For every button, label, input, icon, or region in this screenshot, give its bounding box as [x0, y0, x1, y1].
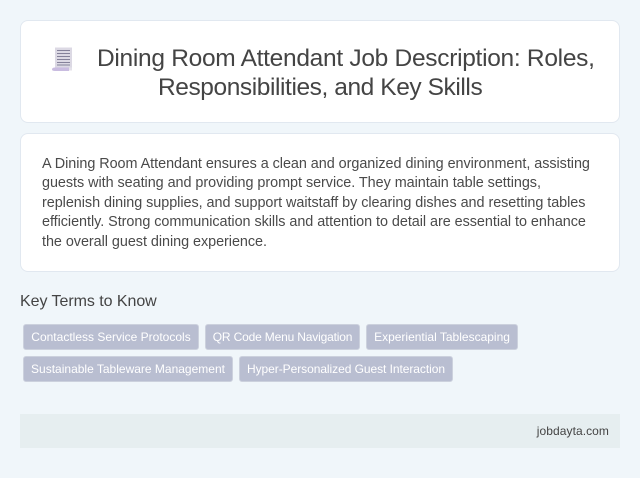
- title: Dining Room Attendant Job Description: Roles,: [97, 45, 595, 72]
- description text: the overall guest dining experience.: [42, 234, 267, 250]
- tag: Sustainable Tableware Management: [31, 362, 225, 376]
- tag: [239, 356, 453, 382]
- tag: [366, 324, 518, 350]
- tag: Hyper-Personalized Guest Interaction: [247, 362, 445, 376]
- tag: [205, 324, 360, 350]
- tag: [23, 324, 199, 350]
- tag: Experiential Tablescaping: [374, 330, 510, 344]
- tag: [23, 356, 233, 382]
- footer text: jobdayta.com: [537, 424, 609, 438]
- description text: replenish dining supplies, and support waitstaff by clearing dishes and resetting tables: [42, 194, 585, 210]
- description text: efficiently. Strong communication skills and attention to detail are essential to enhance: [42, 214, 586, 230]
- description text: A Dining Room Attendant ensures a clean and organized dining environment, assisting: [42, 156, 590, 172]
- title second line: Responsibilities, and Key Skills: [158, 74, 482, 101]
- tag: QR Code Menu Navigation: [213, 330, 352, 344]
- tag: Contactless Service Protocols: [31, 330, 191, 344]
- heading: key terms: Key Terms to Know: [20, 293, 157, 310]
- description text: [42, 156, 590, 250]
- icon: receipt document: [52, 48, 72, 71]
- description text: guests with seating and providing prompt service. They maintain table settings,: [42, 175, 541, 191]
- panel: title card: [20, 20, 620, 123]
- footer bar: [20, 414, 620, 448]
- panel: description card: [20, 133, 620, 272]
